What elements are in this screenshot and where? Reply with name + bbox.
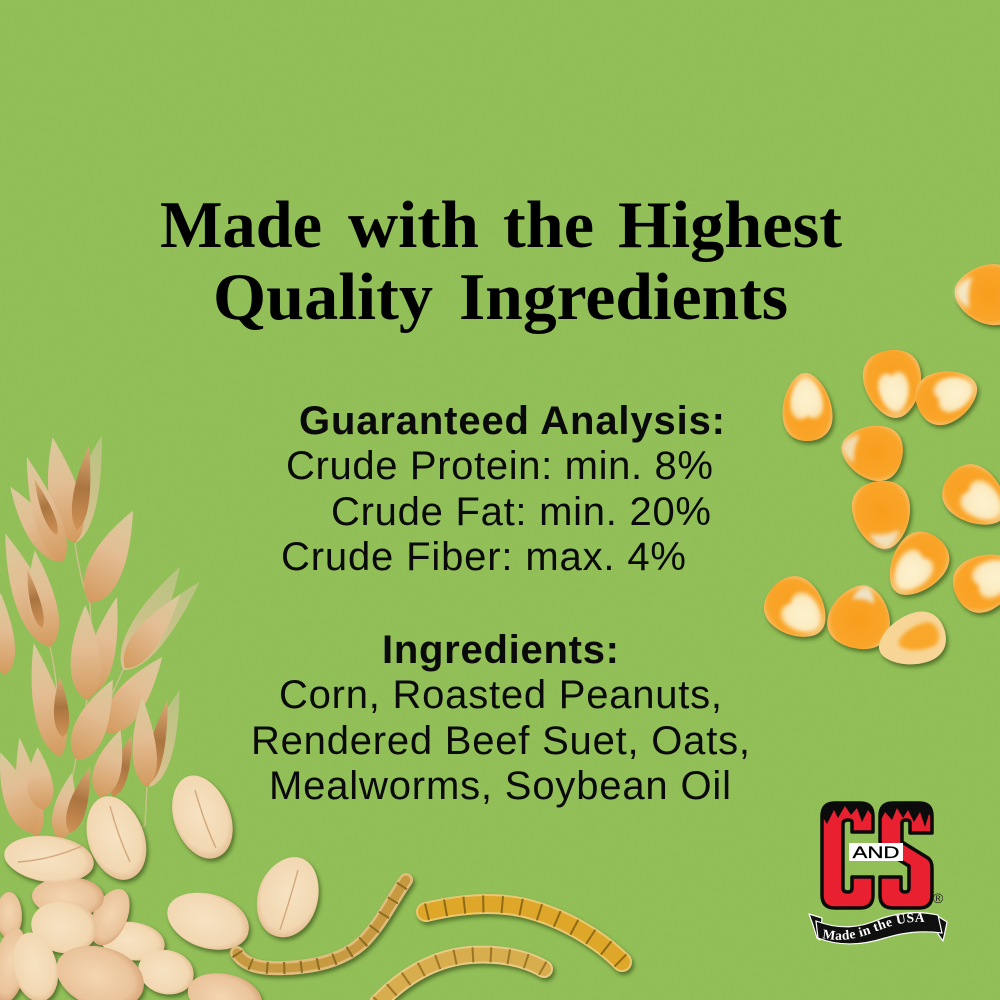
analysis: crude fiber: Crude Fiber: max. 4% — [281, 535, 686, 579]
kernel — [860, 346, 926, 422]
ingredients list: Rendered Beef Suet, Oats, — [251, 719, 750, 763]
illustration: peanuts — [0, 767, 329, 1000]
heading: guaranteed analysis: Guaranteed Analysis: — [299, 399, 725, 443]
kernel — [849, 477, 915, 553]
title: the — [503, 188, 594, 262]
AND plate: AND — [852, 843, 900, 862]
title: Ingredients — [459, 260, 788, 334]
kernel — [932, 454, 1000, 540]
ingredients list — [251, 673, 750, 808]
title — [160, 188, 843, 334]
banner: Made in the USA: Made in the USA — [822, 913, 924, 940]
text block: ingredients — [251, 628, 750, 808]
illustration: mealworms — [237, 880, 622, 1000]
kernel — [872, 605, 952, 675]
title: Made — [160, 188, 322, 262]
ingredients list: Corn, Roasted Peanuts, — [279, 673, 722, 717]
logo: C and S, Made in the USA — [808, 801, 948, 944]
analysis: crude fat: Crude Fat: min. 20% — [331, 490, 711, 534]
illustration: corn kernels — [754, 261, 1000, 675]
mealworm left — [237, 880, 406, 968]
heading: ingredients: Ingredients: — [382, 628, 619, 672]
kernel — [823, 580, 897, 654]
logo letters — [820, 800, 935, 908]
kernel — [908, 360, 986, 432]
banner: Made in the USA — [808, 912, 948, 944]
title: Quality — [213, 260, 433, 334]
ingredients list: Mealworms, Soybean Oil — [269, 764, 731, 808]
kernel — [875, 522, 959, 608]
kernel — [754, 566, 840, 652]
illustration: oat sprig — [0, 432, 209, 842]
AND plate — [849, 843, 903, 862]
title: with — [348, 188, 479, 262]
analysis: crude protein: Crude Protein: min. 8% — [286, 444, 713, 488]
kernel — [952, 261, 1000, 327]
mealworm bottom — [378, 955, 544, 1000]
kernel — [944, 541, 1000, 621]
registered mark: ® — [933, 890, 944, 906]
kernel — [780, 371, 834, 443]
title: Highest — [618, 188, 843, 262]
kernel — [836, 419, 908, 485]
mealworm right — [426, 904, 622, 962]
text block: guaranteed analysis — [281, 399, 725, 579]
